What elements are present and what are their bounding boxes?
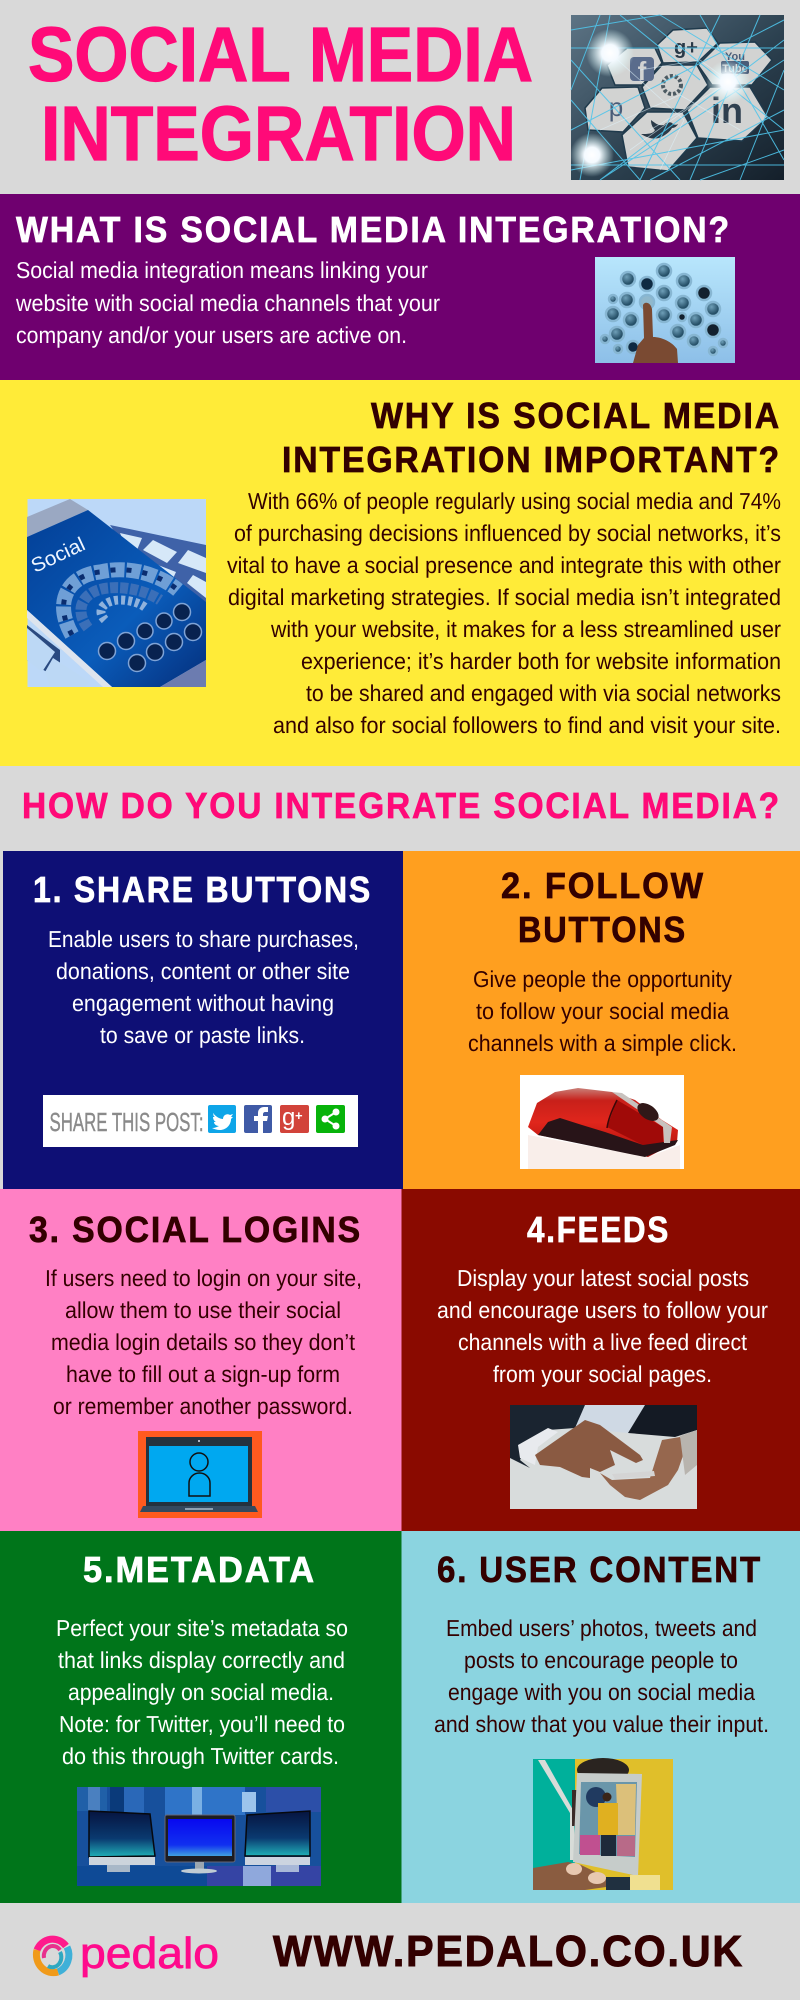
image: social media hexagons: f (638, 56, 647, 86)
panel: 2 follow buttons (403, 851, 800, 1189)
text: feeds description: Display your latest social posts (457, 1265, 749, 1291)
image: smartphone with social apps (27, 499, 206, 687)
panel: header (0, 0, 800, 194)
text: share description: Enable users to share purchases, (48, 926, 359, 952)
image: social media hexagons: Tube (722, 63, 748, 75)
text: definition (15, 257, 440, 348)
image: hands using phone (510, 1405, 697, 1509)
panel: what is social media integration (0, 194, 800, 380)
image: social media hexagons (570, 15, 784, 180)
text: follow description: channels with a simple click. (468, 1030, 737, 1056)
heading: share buttons: 1. SHARE BUTTONS (33, 869, 372, 910)
icon: twitter (208, 1105, 236, 1133)
panel: 1 share buttons (3, 851, 403, 1189)
icon: facebook (244, 1105, 272, 1133)
text: user content description: posts to encourage people to (464, 1647, 738, 1673)
panel: footer (0, 1903, 800, 2000)
text: logins description: allow them to use their social (65, 1297, 341, 1323)
panel: how do you integrate (0, 766, 800, 851)
text: statistics paragraph (227, 488, 781, 738)
heading: social logins: 3. SOCIAL LOGINS (29, 1209, 362, 1250)
title: SOCIAL MEDIA (28, 12, 533, 98)
text: share description: donations, content or other site (56, 958, 350, 984)
text: metadata description: that links display correctly and (58, 1647, 345, 1673)
website url: WWW.PEDALO.CO.UK (273, 1927, 744, 1976)
icon: google plus (280, 1104, 309, 1133)
text: user content description: Embed users’ photos, tweets and (446, 1615, 757, 1641)
text: metadata description: appealingly on social media. (68, 1679, 334, 1705)
heading: follow buttons: 2. FOLLOW (501, 865, 705, 906)
image: hand holding instant photo (533, 1758, 673, 1890)
text: definition: website with social media channels that your (15, 290, 440, 316)
heading: feeds: 4.FEEDS (527, 1209, 670, 1250)
text: user content description: and show that you value their input. (434, 1711, 769, 1737)
image: smartphone with social apps: Social (28, 534, 89, 578)
image: social media hexagons: You (725, 51, 745, 63)
text: share description: to save or paste links. (100, 1022, 305, 1048)
text: statistics paragraph: digital marketing strategies. If social media isn’t integrated (228, 584, 781, 610)
icon: laptop with user (138, 1431, 262, 1518)
image: social media hexagons: p (609, 92, 623, 122)
text: follow description: Give people the opportunity (473, 966, 732, 992)
text: logins description: media login details so they don’t (51, 1329, 356, 1355)
icon: pedalo swirl (36, 1939, 69, 1973)
heading: why important (282, 395, 781, 480)
image: social media hexagons: g+ (674, 37, 698, 59)
text: definition: company and/or your users are active on. (16, 322, 407, 348)
text: metadata description: Note: for Twitter, you’ll need to (59, 1711, 345, 1737)
title: INTEGRATION (41, 91, 516, 177)
panel: 4 feeds (402, 1189, 800, 1531)
text: feeds description: channels with a live feed direct (458, 1329, 748, 1355)
icon: share (316, 1105, 345, 1133)
text: user content description (434, 1615, 769, 1737)
panel: why is it important (0, 380, 800, 766)
heading: metadata: 5.METADATA (83, 1549, 316, 1590)
panel: 3 social logins (0, 1189, 402, 1531)
share this post bar (43, 1095, 358, 1147)
icon: google plus: g (282, 1104, 295, 1131)
panel: 6 user content (402, 1531, 800, 1903)
text: definition: Social media integration means linking your (16, 257, 428, 283)
logo: pedalo: pedalo (80, 1929, 219, 1978)
text: metadata description (56, 1615, 348, 1769)
heading: why important: WHY IS SOCIAL MEDIA (371, 395, 781, 436)
image: social media hexagons: in (711, 90, 743, 131)
image: three monitors (77, 1787, 321, 1886)
text: logins description: If users need to login on your site, (45, 1265, 362, 1291)
heading: user content: 6. USER CONTENT (437, 1549, 762, 1590)
text: statistics paragraph: and also for social followers to find and visit your site. (273, 712, 781, 738)
text: logins description: have to fill out a sign-up form (66, 1361, 340, 1387)
heading: follow buttons (501, 865, 705, 950)
text: metadata description: Perfect your site’s metadata so (56, 1615, 348, 1641)
text: follow description: to follow your social media (476, 998, 729, 1024)
text: logins description: or remember another password. (53, 1393, 353, 1419)
heading: follow buttons: BUTTONS (518, 909, 687, 950)
text: metadata description: do this through Twitter cards. (62, 1743, 339, 1769)
share this post bar: SHARE THIS POST: (50, 1107, 204, 1137)
text: logins description (45, 1265, 362, 1419)
text: follow description (468, 966, 737, 1056)
image: hand touching social icons (595, 257, 735, 363)
heading: what is: WHAT IS SOCIAL MEDIA INTEGRATION? (16, 209, 731, 250)
text: share description: engagement without having (72, 990, 334, 1016)
text: share description (48, 926, 359, 1048)
image: red computer mouse (520, 1075, 684, 1169)
text: user content description: engage with you on social media (448, 1679, 755, 1705)
text: feeds description: from your social pages. (493, 1361, 712, 1387)
text: feeds description (437, 1265, 768, 1387)
title (28, 12, 533, 177)
text: feeds description: and encourage users to follow your (437, 1297, 768, 1323)
icon: google plus: + (295, 1108, 303, 1123)
panel: 5 metadata (0, 1531, 402, 1903)
